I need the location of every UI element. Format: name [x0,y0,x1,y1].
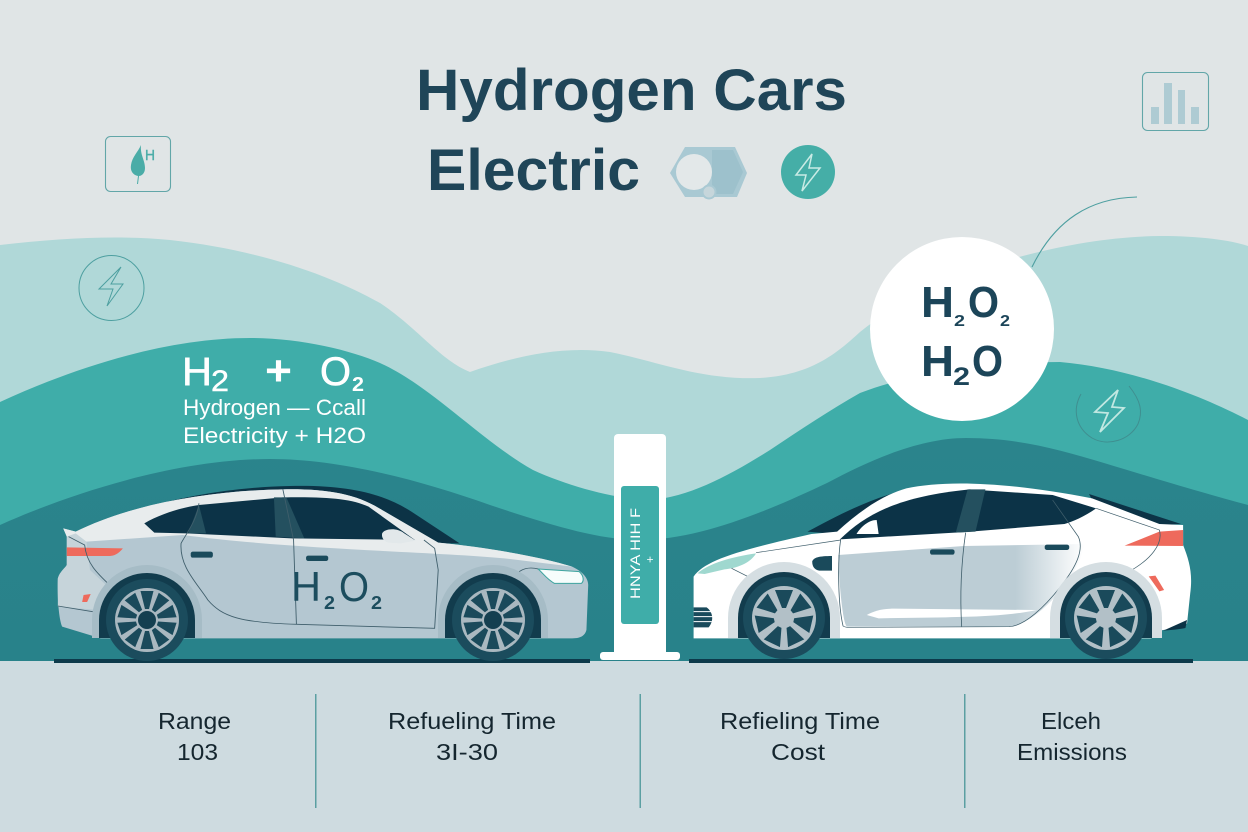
car door label: 2 [371,593,382,613]
car door label [291,563,382,613]
car door label: H [291,563,321,610]
stat: emissions: Emissions [1017,739,1127,765]
car door label: 2 [324,593,335,613]
stat: range [158,708,231,765]
stat: refueling time [388,708,556,765]
car door label: O [339,563,369,610]
reaction formula: 2 [211,365,229,398]
stat: refueling time: 3I-30 [436,739,498,765]
callout: chemical formulas [870,237,1054,421]
wheel rear [1065,577,1147,659]
ground line right [689,659,1193,663]
title: Electric [427,138,640,203]
callout: chemical formulas: O [972,337,1003,386]
connector curve [1032,197,1137,267]
icon: hydrogen leaf box [106,136,170,192]
reaction formula: Electricity + H2O [183,423,366,448]
divider 2 [640,694,641,808]
callout: chemical formulas: H [921,337,954,386]
fueling station: HNYA HIH F [627,508,643,599]
icon: lightning circle right [1076,386,1141,442]
stat: refueling time: Refueling Time [388,708,556,734]
stat: range: Range [158,708,231,734]
title: Hydrogen Cars [416,58,847,123]
wheel front [452,579,534,661]
divider 1 [315,694,316,808]
icon: hydrogen hexagon [670,147,747,198]
icon: lightning badge [781,145,835,199]
stat: emissions: Elceh [1041,708,1101,734]
reaction formula: H [182,350,212,394]
fueling station: + [643,556,657,563]
reaction formula: + [265,347,292,394]
wheel rear [106,579,188,661]
callout: chemical formulas: O [968,278,999,327]
background hills [0,236,1248,832]
stat: cost: Refieling Time [720,708,880,734]
reaction formula [182,347,366,448]
reaction formula: 2 [352,374,364,396]
icon: chart box [1142,72,1208,130]
electric car [694,483,1191,659]
fueling station [600,434,680,660]
callout: chemical formulas: 2 [1000,313,1010,330]
stat: range: 103 [177,739,218,765]
title [416,58,847,203]
callout: chemical formulas: H [921,278,954,327]
icon: hydrogen leaf box: H [145,147,155,164]
stat: cost [720,708,880,765]
wheel front [743,577,825,659]
divider 3 [964,694,966,808]
ground line left [54,659,590,663]
stat: emissions [1017,708,1127,765]
callout: chemical formulas: 2 [954,313,965,330]
callout: chemical formulas: 2 [953,363,970,391]
bottom stats band background [0,661,1248,832]
icon: lightning circle left [79,256,144,320]
reaction formula: Hydrogen — Ccall [183,395,366,420]
reaction formula: O [320,350,351,394]
stat: cost: Cost [771,739,826,765]
hydrogen car [58,486,588,661]
